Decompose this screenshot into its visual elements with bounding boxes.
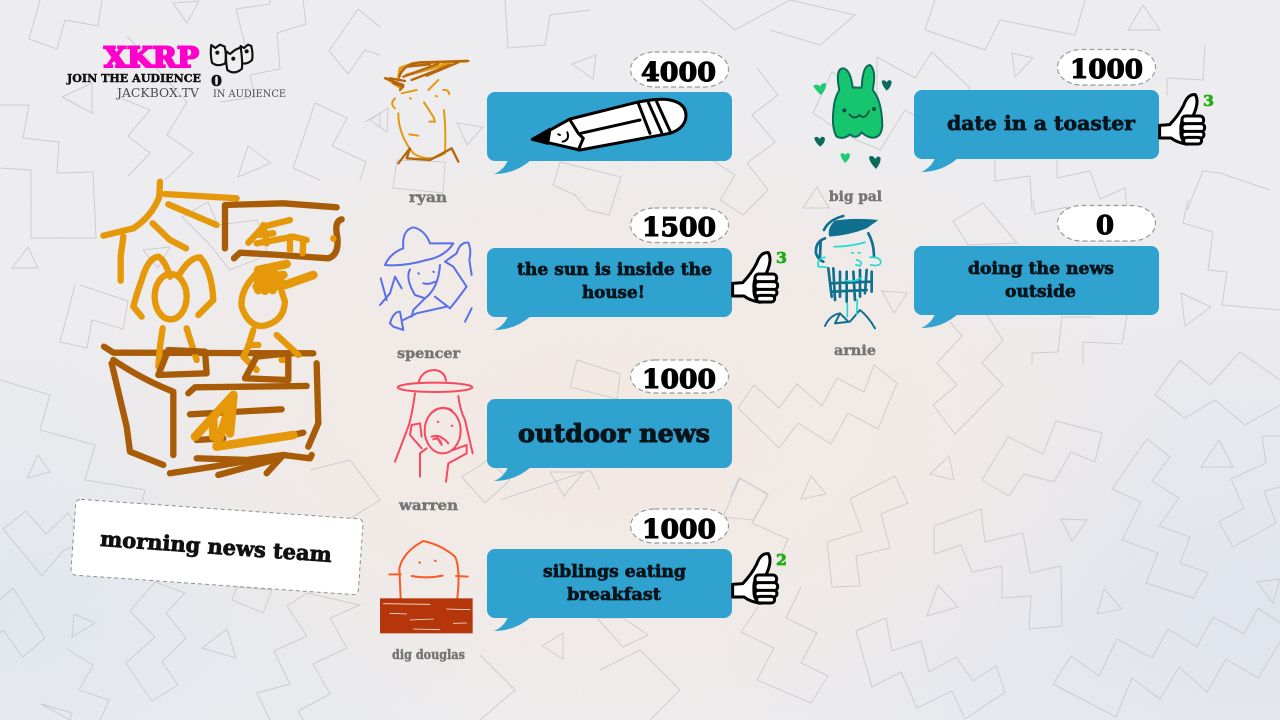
name: warren: warren (398, 498, 458, 514)
logo: XKRP room code (66, 41, 201, 100)
speech bubble: siblings eating breakfast: breakfast (567, 585, 661, 605)
speech bubble: doing the news outside (914, 246, 1159, 328)
audience count: 0 (211, 72, 222, 90)
speech bubble: date in a toaster (914, 90, 1159, 172)
icon: thumbs up, 2 votes (733, 551, 787, 603)
entry: big pal (813, 50, 1214, 205)
entry: warren (395, 360, 732, 514)
caption text: morning news team (99, 526, 333, 567)
entry: ryan (385, 52, 732, 206)
entry: spencer (380, 208, 787, 362)
name: spencer: spencer (397, 346, 461, 362)
speech bubble: doing the news outside: outside (1005, 282, 1076, 302)
score: 0 (1058, 206, 1156, 241)
score: 0: 0 (1096, 211, 1114, 241)
speech bubble: siblings eating breakfast: siblings eating (543, 562, 686, 582)
icon: thumbs up, 2 votes: 2 (776, 551, 787, 569)
icon: thumbs up, 3 votes (1160, 92, 1214, 144)
icon: thumbs up, 3 votes: 3 (776, 249, 787, 267)
name: dig douglas: dig douglas (392, 648, 465, 663)
speech bubble with pencil (487, 92, 732, 174)
avatar: big pal (813, 65, 892, 169)
join prompt: JOIN THE AUDIENCE (66, 72, 201, 85)
score: 1500 (630, 208, 728, 243)
main drawing: news team at desk (103, 182, 342, 475)
score: 1000 (1058, 50, 1156, 85)
avatar: dig douglas (380, 541, 473, 633)
score: 4000: 4000 (641, 58, 716, 88)
icon: pencil (532, 99, 686, 150)
score: 1000 (630, 360, 728, 395)
score: 4000 (630, 52, 728, 88)
speech bubble: date in a toaster: date in a toaster (947, 111, 1135, 135)
speech bubble: outdoor news: outdoor news (518, 419, 710, 448)
score: 1500: 1500 (642, 213, 716, 243)
speech bubble: the sun is inside the house: house! (582, 283, 645, 303)
name: arnie: arnie (834, 343, 876, 359)
entry: arnie (816, 206, 1159, 359)
entry: dig douglas (380, 509, 787, 663)
icon: thumbs up, 3 votes: 3 (1203, 92, 1214, 110)
score: 1000: 1000 (642, 515, 716, 545)
avatar: arnie (816, 216, 881, 328)
join url: JACKBOX.TV (115, 86, 199, 100)
avatar: warren (395, 370, 473, 482)
icon: audience cats (211, 45, 253, 72)
speech bubble: outdoor news (487, 399, 732, 481)
score: 1000: 1000 (642, 365, 716, 395)
speech bubble: the sun is inside the house: the sun is inside the (517, 260, 712, 280)
score: 1000 (630, 509, 728, 545)
name: big pal: big pal (829, 189, 882, 205)
room code: XKRP (104, 41, 199, 74)
icon: thumbs up, 3 votes (733, 249, 787, 302)
avatar: ryan (385, 61, 468, 163)
caption card: morning news team (71, 499, 363, 595)
score: 1000: 1000 (1070, 55, 1143, 85)
audience label: IN AUDIENCE (213, 88, 286, 100)
speech bubble: the sun is inside the house (487, 248, 732, 330)
speech bubble: siblings eating breakfast (487, 549, 732, 631)
avatar: spencer (380, 227, 472, 330)
name: ryan: ryan (409, 190, 447, 206)
audience counter (211, 45, 286, 100)
speech bubble: doing the news outside: doing the news (968, 259, 1114, 279)
